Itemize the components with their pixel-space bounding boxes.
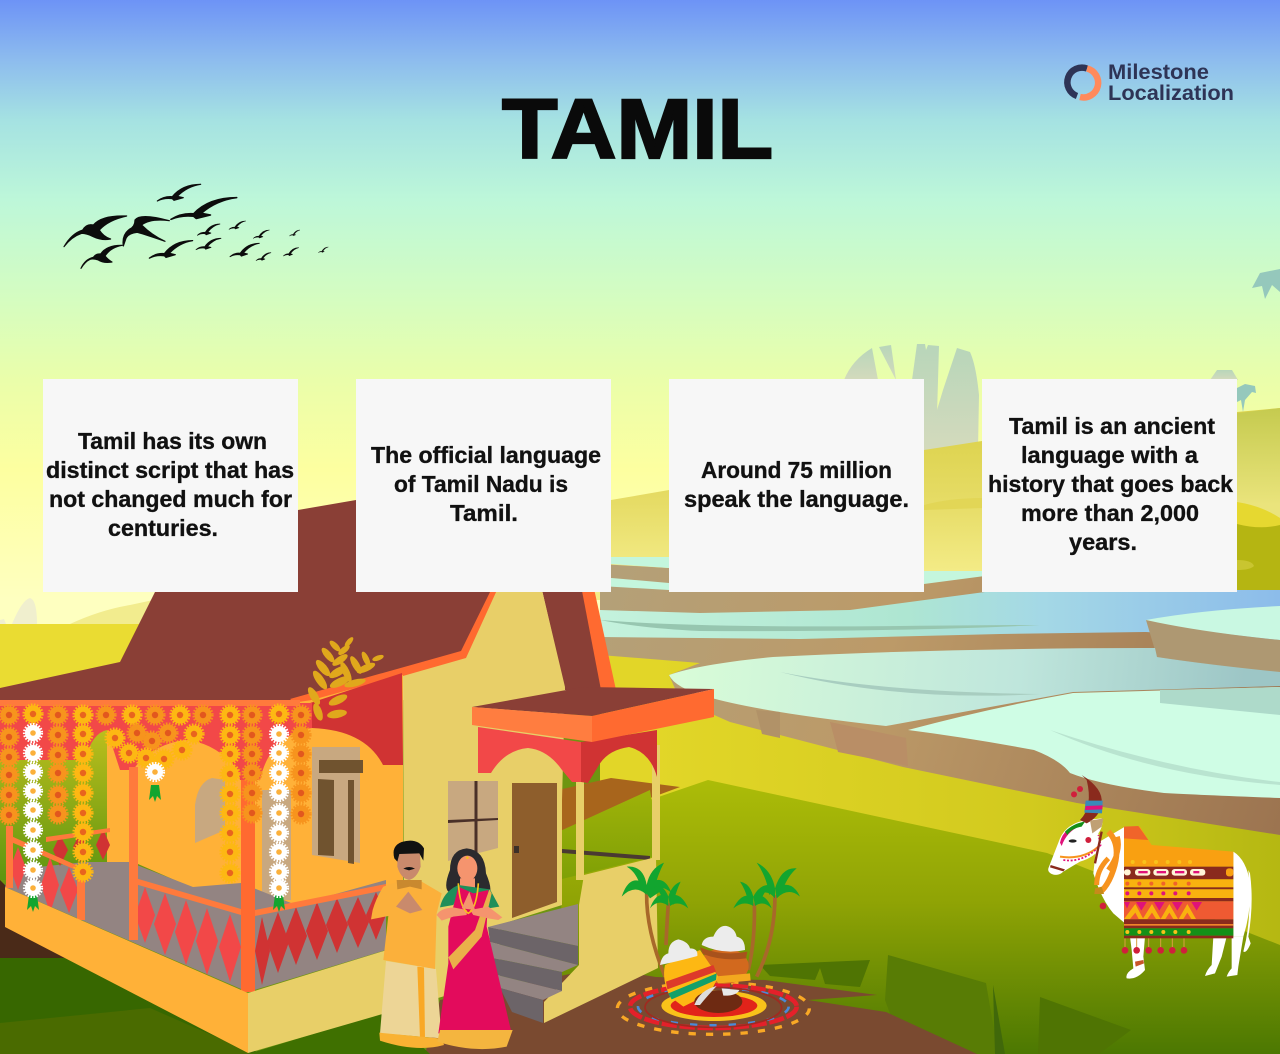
porch rear wall xyxy=(107,675,403,906)
porch frieze dark red xyxy=(304,673,403,765)
distant mountains xyxy=(844,344,1238,450)
text: official language fact: of Tamil Nadu is xyxy=(394,471,568,497)
horns and head decoration xyxy=(1050,775,1103,871)
decorated bull xyxy=(1048,775,1252,979)
roof orange trim xyxy=(290,590,497,706)
text: official language fact: Tamil. xyxy=(450,500,518,526)
woman xyxy=(437,848,513,1049)
logo: Milestone Localization xyxy=(1067,61,1234,105)
porch frieze bright red xyxy=(0,703,312,780)
house xyxy=(0,500,714,1053)
logo wordmark: Localization xyxy=(1108,82,1234,105)
text: script fact: not changed much for xyxy=(49,486,292,512)
dirt path xyxy=(425,968,977,1054)
porch columns xyxy=(576,782,584,880)
stoop xyxy=(544,857,658,1023)
bull body xyxy=(1048,818,1252,979)
icon: circular arrows xyxy=(1067,68,1098,97)
porch floor xyxy=(5,862,386,992)
gable wall xyxy=(403,590,565,955)
text: history fact xyxy=(988,413,1233,555)
awning arch dark xyxy=(581,730,657,783)
terracotta pot xyxy=(699,926,751,984)
title: TAMIL xyxy=(502,82,773,176)
bell pendant xyxy=(1094,887,1106,909)
steps xyxy=(488,904,578,1023)
rice terraces xyxy=(600,557,1280,835)
awning fascia xyxy=(472,707,592,742)
rangoli pattern xyxy=(617,982,809,1034)
golden rice stalks xyxy=(306,636,384,722)
porch backdrop xyxy=(0,704,112,880)
rice field yellow band xyxy=(600,640,1280,1054)
sugarcane leaves xyxy=(622,863,800,908)
text: history fact: Tamil is an ancient xyxy=(1009,413,1215,439)
text: official language fact: The official language xyxy=(371,442,601,468)
logo wordmark: Milestone xyxy=(1108,61,1209,84)
coconut xyxy=(694,986,742,1013)
rangoli with pots and sugarcane xyxy=(617,863,809,1034)
brown patch and view through porch xyxy=(558,778,680,832)
text: history fact: language with a xyxy=(1021,442,1198,468)
text: speakers fact xyxy=(684,457,909,512)
panel: history fact xyxy=(982,379,1237,592)
text: script fact: distinct script that has xyxy=(46,457,294,483)
green field xyxy=(560,780,1280,1054)
text: speakers fact: Around 75 million xyxy=(701,457,892,483)
marigold necklace xyxy=(1097,832,1118,892)
sugarcane stalks xyxy=(647,893,775,977)
foundation left face xyxy=(5,887,248,1053)
flock of birds xyxy=(64,184,328,268)
grass and earth at left of house xyxy=(0,880,430,1054)
text: script fact xyxy=(46,428,294,541)
text: official language fact xyxy=(371,442,601,526)
panel: script fact xyxy=(43,379,298,592)
foundation right face xyxy=(248,925,500,1053)
door xyxy=(512,783,557,918)
yellow pot xyxy=(660,939,718,1007)
text: history fact: history that goes back xyxy=(988,471,1233,497)
background hills xyxy=(0,408,1280,760)
panel: official language fact xyxy=(356,379,611,592)
man xyxy=(371,841,444,1048)
couple in greeting pose xyxy=(371,841,513,1049)
text: history fact: more than 2,000 xyxy=(1021,500,1199,526)
palm silhouettes xyxy=(1237,269,1280,412)
porch beam xyxy=(0,700,300,706)
rails and pillars xyxy=(6,767,386,940)
text: script fact: centuries. xyxy=(108,515,218,541)
text: history fact: years. xyxy=(1069,529,1137,555)
front window xyxy=(448,781,498,861)
awning arch bright xyxy=(478,727,581,782)
text: speakers fact: speak the language. xyxy=(684,486,909,512)
marigold garlands xyxy=(0,705,310,912)
main roof xyxy=(0,500,496,704)
pale mountain far left xyxy=(12,598,37,624)
ground behind house xyxy=(0,700,610,1054)
back roof xyxy=(542,590,605,690)
awning roof xyxy=(472,687,714,716)
text: script fact: Tamil has its own xyxy=(78,428,267,454)
blanket xyxy=(1124,826,1233,938)
dark grass patches xyxy=(760,955,1131,1054)
terrace earth xyxy=(600,564,1280,835)
blanket tassels xyxy=(1122,938,1187,967)
panel: speakers fact xyxy=(669,379,924,592)
logo wordmark xyxy=(1108,61,1234,105)
railing lozenges xyxy=(10,847,241,982)
side windows xyxy=(195,778,225,843)
